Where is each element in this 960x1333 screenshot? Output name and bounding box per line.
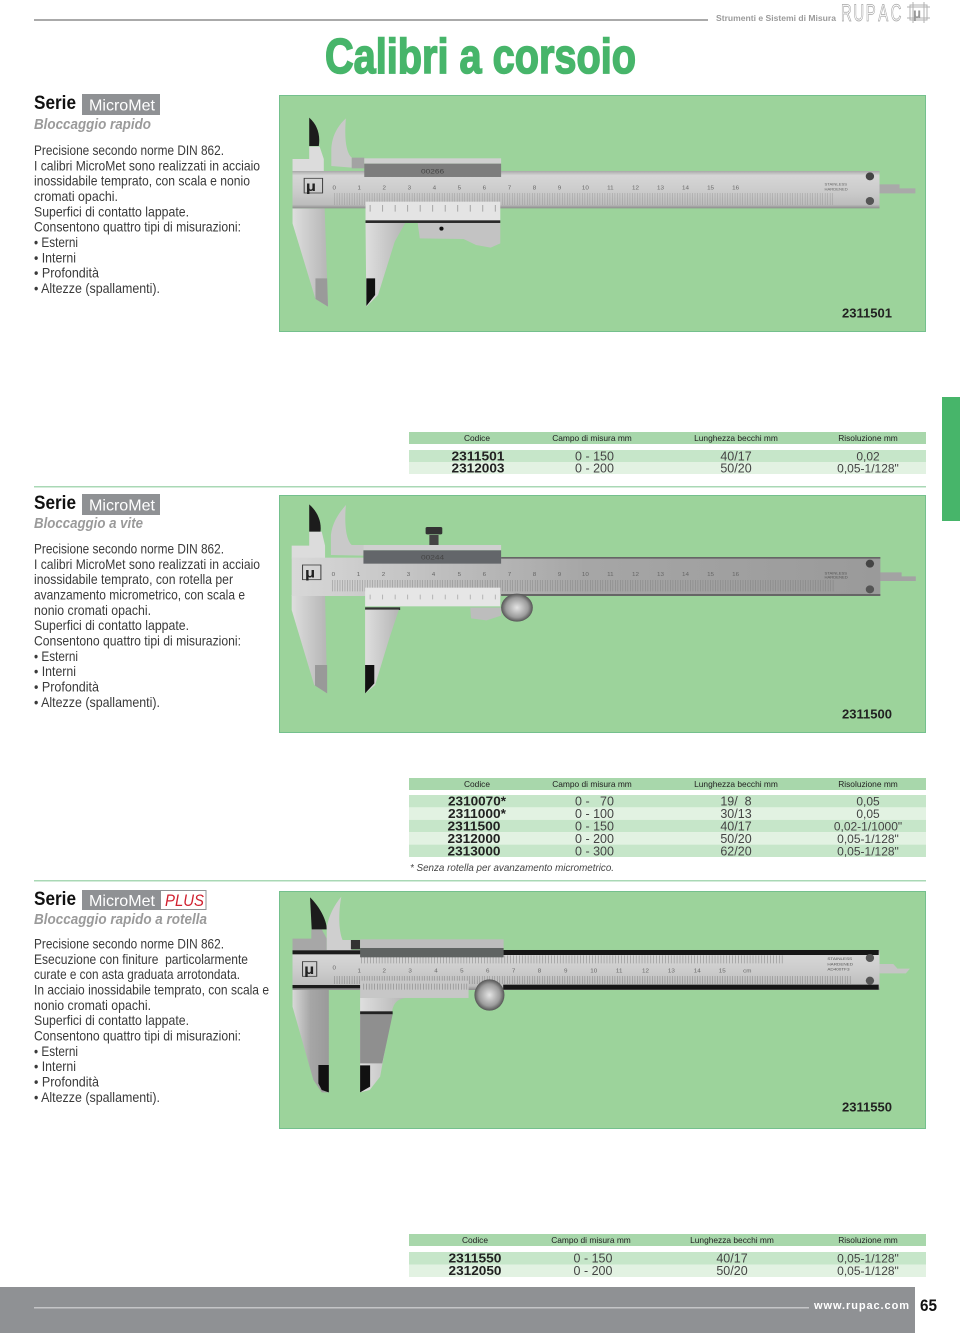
table 3: Campo di misura mm	[551, 1235, 631, 1245]
icon: vernier caliper PLUS	[293, 897, 910, 1092]
table 2: 0 - 100	[575, 807, 614, 821]
section 1 description: cromati opachi.	[34, 189, 118, 204]
section 1 subtitle: Bloccaggio rapido	[34, 117, 151, 133]
icon: vernier caliper PLUS: 9	[564, 969, 568, 974]
table 2: 2310070*	[448, 794, 506, 808]
section 3 subtitle: Bloccaggio rapido a rotella	[34, 912, 207, 928]
icon: vernier caliper with thumb wheel: 4	[432, 572, 435, 578]
table 2: 2311000*	[448, 807, 506, 821]
table 2: 0 - 300	[575, 844, 614, 858]
table 2: 62/20	[720, 844, 752, 858]
title: Calibri a corsoio	[325, 30, 636, 84]
table 2: 30/13	[720, 807, 752, 821]
icon: vernier caliper PLUS: 6	[486, 969, 490, 974]
icon: vernier caliper with thumb wheel: µ	[305, 566, 315, 581]
icon: vernier caliper with thumb wheel: 8	[533, 572, 536, 578]
icon: vernier caliper PLUS: 3	[408, 969, 412, 974]
icon: vernier caliper PLUS: 11	[616, 969, 622, 974]
section 2 description: • Interni	[34, 664, 76, 679]
table 1: 2311501	[452, 450, 505, 464]
table 2	[409, 778, 926, 874]
table 3: 2312050	[448, 1264, 502, 1278]
icon: vernier caliper: 12	[632, 186, 639, 191]
icon: vernier caliper PLUS: 7	[512, 969, 515, 974]
section 2 subtitle: Bloccaggio a vite	[34, 516, 143, 532]
icon: vernier caliper with thumb wheel: 9	[558, 572, 561, 578]
panel: caliper 2311550	[280, 892, 926, 1128]
icon: vernier caliper with thumb wheel	[292, 504, 916, 693]
product code: 2311500	[842, 706, 892, 722]
icon: vernier caliper PLUS: 14	[694, 969, 701, 974]
table 2: 2312000	[448, 832, 501, 846]
section 1 description: inossidabile temprato, con scala e nonio	[34, 174, 250, 189]
table 1: Codice	[464, 433, 490, 443]
table 2: 2313000	[448, 844, 501, 858]
icon: vernier caliper with thumb wheel: 6	[483, 572, 486, 578]
section 1 description: • Profondità	[34, 266, 99, 281]
table 1: Lunghezza becchi mm	[694, 433, 778, 443]
icon: vernier caliper PLUS: 10	[590, 969, 597, 974]
section 1 heading	[34, 93, 160, 133]
table 2: 0,05	[856, 807, 880, 821]
table 3: 0,05-1/128"	[837, 1252, 899, 1266]
icon: vernier caliper: 4	[433, 186, 436, 191]
icon: vernier caliper: 5	[458, 186, 461, 191]
table 1: 40/17	[720, 450, 752, 464]
section 2 description: nonio cromati opachi.	[34, 603, 151, 618]
table 2: 50/20	[720, 832, 752, 846]
section 1 description: • Esterni	[34, 235, 78, 250]
section 1 description: • Altezze (spallamenti).	[34, 281, 160, 296]
section 2 description: avanzamento micrometrico, con scala e	[34, 588, 245, 602]
section 1 description: Superfici di contatto lappate.	[34, 204, 189, 219]
product code: 2311501	[842, 306, 892, 320]
table 2: 0,05	[856, 794, 880, 808]
series badge: PLUS	[165, 891, 205, 910]
table 2: Codice	[464, 779, 490, 789]
panel: caliper 2311500	[280, 496, 926, 732]
icon: vernier caliper with thumb wheel: 12	[632, 572, 639, 578]
icon: vernier caliper: 14	[682, 186, 689, 191]
table 2: 0,05-1/128"	[837, 832, 899, 846]
section 2 description	[34, 542, 260, 710]
section 2 description: Precisione secondo norme DIN 862.	[34, 542, 224, 556]
table 2: 0,02-1/1000"	[834, 820, 902, 834]
section 3 description: nonio cromati opachi.	[34, 998, 151, 1013]
table 1	[409, 432, 926, 476]
section 1 heading: Serie	[34, 93, 76, 114]
section 1 description	[34, 143, 260, 296]
icon: vernier caliper: 3	[408, 186, 411, 191]
section 1 description: I calibri MicroMet sono realizzati in acciaio	[34, 158, 260, 173]
section 2 description: • Profondità	[34, 680, 99, 694]
table 3: 0,05-1/128"	[837, 1264, 899, 1278]
icon: vernier caliper with thumb wheel: 5	[458, 572, 461, 578]
section 2 description: Superfici di contatto lappate.	[34, 618, 189, 633]
icon: vernier caliper: 10	[582, 186, 589, 191]
section 1 description: Consentono quattro tipi di misurazioni:	[34, 220, 241, 235]
table 1: 0 - 150	[575, 450, 614, 464]
icon: vernier caliper: HARDENED	[824, 188, 848, 191]
table 2: 0 - 200	[575, 832, 614, 846]
brand wordmark: RUPAC	[841, 1, 901, 27]
table 2: Lunghezza becchi mm	[694, 779, 778, 789]
section 2 description: inossidabile temprato, con rotella per	[34, 572, 233, 587]
table 3	[409, 1234, 926, 1278]
table 3: Risoluzione mm	[838, 1235, 898, 1245]
section 3 description: • Esterni	[34, 1044, 78, 1059]
icon: vernier caliper PLUS: 2	[383, 969, 386, 974]
icon: vernier caliper PLUS: 0	[332, 966, 336, 971]
icon: vernier caliper PLUS: HARDENED	[827, 962, 853, 966]
section 1 description: Precisione secondo norme DIN 862.	[34, 143, 224, 158]
section 3 description: • Profondità	[34, 1074, 99, 1090]
section 3 description: • Altezze (spallamenti).	[34, 1090, 160, 1105]
table 1: 0 - 200	[575, 462, 614, 476]
icon: vernier caliper	[293, 118, 915, 307]
table 2: Risoluzione mm	[838, 779, 898, 789]
table 3: 2311550	[448, 1252, 502, 1266]
section 2 description: I calibri MicroMet sono realizzati in acciaio	[34, 557, 260, 572]
product code: 2311550	[842, 1100, 892, 1114]
icon: vernier caliper with thumb wheel: 2	[382, 572, 385, 578]
icon: vernier caliper PLUS: 1	[358, 969, 361, 974]
table 1: 0,02	[856, 450, 880, 464]
table 1: Campo di misura mm	[552, 433, 632, 443]
table 3: 50/20	[716, 1264, 748, 1278]
website: www.rupac.com	[813, 1300, 909, 1312]
side tab	[942, 397, 960, 521]
icon: vernier caliper with thumb wheel: 10	[582, 572, 589, 578]
icon: vernier caliper: 1	[358, 186, 361, 191]
section 3 description: Precisione secondo norme DIN 862.	[34, 936, 224, 952]
table 1: 50/20	[720, 462, 752, 476]
section 2 description: • Altezze (spallamenti).	[34, 695, 160, 710]
section 2 description: • Esterni	[34, 649, 78, 664]
icon: vernier caliper with thumb wheel: 7	[508, 572, 511, 578]
icon: vernier caliper: 0	[332, 186, 336, 191]
table 3: 0 - 150	[574, 1252, 613, 1266]
section 3 description: • Interni	[34, 1059, 76, 1074]
icon: vernier caliper with thumb wheel: 15	[707, 572, 714, 578]
table 1: Risoluzione mm	[838, 433, 898, 443]
section 3 description: Esecuzione con finiture particolarmente	[34, 952, 248, 967]
brand logo	[907, 2, 930, 23]
icon: vernier caliper: 6	[483, 186, 486, 191]
section 1 description: • Interni	[34, 250, 76, 265]
section 3 heading: Serie	[34, 889, 76, 910]
icon: vernier caliper: 11	[607, 186, 614, 191]
icon: vernier caliper PLUS: µ	[304, 963, 314, 978]
icon: vernier caliper PLUS: 8	[538, 969, 541, 974]
icon: vernier caliper with thumb wheel: 3	[407, 572, 410, 578]
section 3 heading	[34, 889, 207, 928]
icon: vernier caliper PLUS: 5	[460, 969, 464, 974]
icon: vernier caliper: 9	[558, 186, 561, 191]
table 2: 2311500	[448, 820, 501, 834]
icon: vernier caliper with thumb wheel: STAINLESS	[824, 572, 848, 575]
icon: vernier caliper with thumb wheel: HARDENED	[824, 576, 848, 579]
icon: vernier caliper PLUS: 4	[434, 969, 438, 974]
icon: vernier caliper PLUS: 13	[668, 969, 675, 974]
icon: vernier caliper: 7	[508, 186, 511, 191]
table 2: 40/17	[720, 820, 752, 834]
section 2 heading: Serie	[34, 493, 76, 514]
table 2: 0 - 150	[575, 820, 614, 834]
section 2 description: Consentono quattro tipi di misurazioni:	[34, 634, 241, 648]
icon: vernier caliper PLUS: 12	[642, 969, 649, 974]
icon: vernier caliper with thumb wheel: 16	[732, 572, 739, 578]
brand logo: µ	[913, 5, 921, 21]
icon: vernier caliper: 00266	[421, 167, 444, 175]
section 3 description: curate e con asta graduata arrotondata.	[34, 967, 240, 982]
icon: vernier caliper: 2	[383, 186, 386, 191]
icon: vernier caliper: 16	[732, 186, 739, 191]
icon: vernier caliper with thumb wheel: 13	[657, 572, 664, 578]
icon: vernier caliper: 8	[533, 186, 536, 191]
table 3: Codice	[462, 1235, 488, 1245]
page number: 65	[920, 1296, 937, 1315]
icon: vernier caliper with thumb wheel: 11	[607, 572, 614, 578]
series badge: MicroMet	[89, 893, 156, 910]
table 3: Lunghezza becchi mm	[690, 1235, 774, 1245]
table 3: 0 - 200	[574, 1264, 613, 1278]
table 1: 0,05-1/128"	[837, 462, 899, 476]
section 3 description: In acciaio inossidabile temprato, con scala e	[34, 982, 269, 998]
icon: vernier caliper PLUS: STAINLESS	[827, 956, 852, 961]
footer	[0, 1287, 937, 1333]
icon: vernier caliper PLUS: 15	[719, 969, 726, 974]
panel: caliper 2311501	[280, 96, 926, 332]
icon: vernier caliper with thumb wheel: 14	[682, 572, 689, 578]
table 2: Campo di misura mm	[552, 779, 632, 789]
icon: vernier caliper PLUS: AD400TF3	[827, 967, 850, 972]
section 2 heading	[34, 493, 160, 532]
table 1: 2312003	[452, 462, 505, 476]
section 3 description	[34, 936, 269, 1105]
icon: vernier caliper: 15	[707, 186, 714, 191]
table 2: 19/ 8	[720, 794, 752, 808]
icon: vernier caliper PLUS: cm	[743, 969, 752, 974]
table 3: 40/17	[716, 1252, 748, 1266]
icon: vernier caliper with thumb wheel: 00244	[421, 553, 444, 561]
section 3 description: Superfici di contatto lappate.	[34, 1013, 189, 1028]
icon: vernier caliper with thumb wheel: 0	[332, 572, 335, 578]
icon: vernier caliper: µ	[306, 180, 316, 195]
icon: vernier caliper: STAINLESS	[824, 183, 848, 187]
table 2: 0,05-1/128"	[837, 844, 899, 858]
header	[34, 1, 930, 27]
table footnote: * Senza rotella per avanzamento micrometrico.	[410, 862, 614, 874]
icon: vernier caliper: 13	[657, 186, 664, 191]
section 3 description: Consentono quattro tipi di misurazioni:	[34, 1028, 241, 1044]
icon: vernier caliper with thumb wheel: 1	[357, 572, 360, 578]
series badge	[82, 890, 206, 910]
table 2: 0 - 70	[575, 794, 614, 808]
series badge: MicroMet	[89, 498, 156, 514]
series badge: MicroMet	[89, 98, 156, 114]
header tagline: Strumenti e Sistemi di Misura	[716, 13, 836, 23]
